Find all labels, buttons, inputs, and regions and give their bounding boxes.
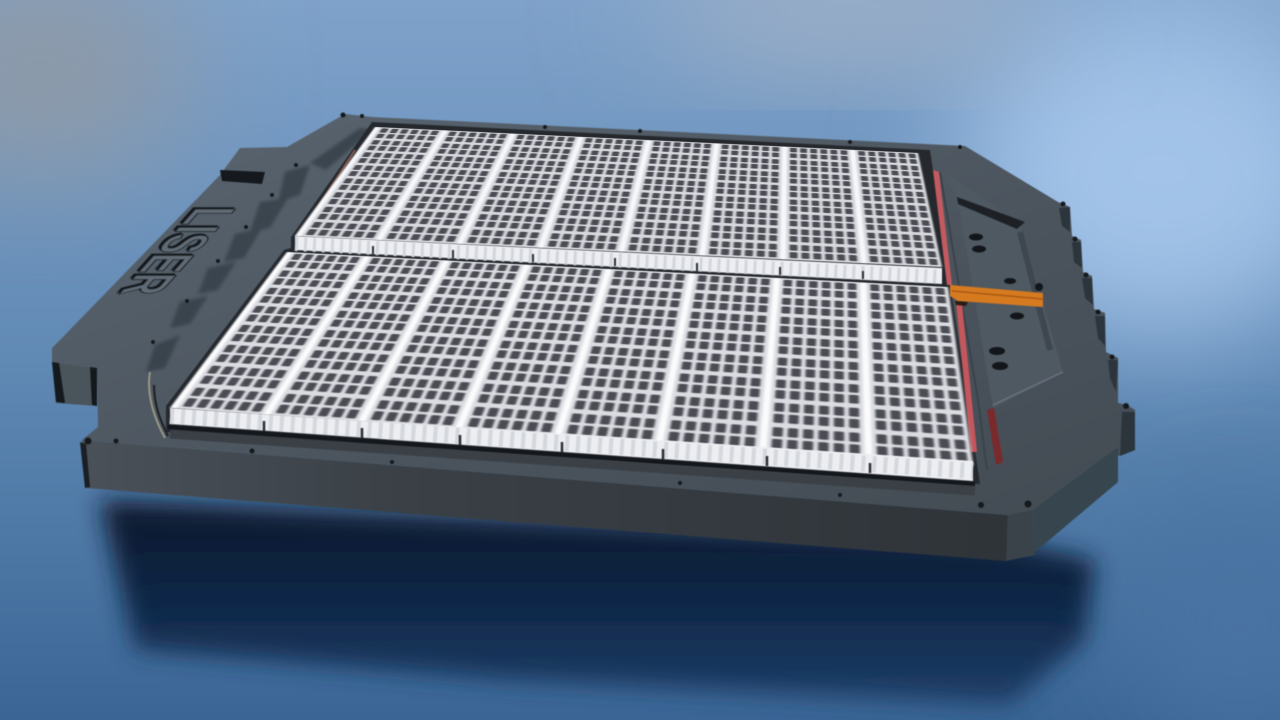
- rear row front strip: [295, 236, 942, 284]
- panel ridge lines: [940, 172, 1063, 470]
- panel holes: [969, 234, 1043, 370]
- recess channel under modules: [168, 427, 975, 491]
- right side ears: [1059, 207, 1135, 456]
- screws: [84, 112, 1129, 508]
- brand lettering: LISER: [105, 207, 249, 295]
- tray front wall: [82, 440, 1008, 561]
- orange busbar connector: [950, 285, 1043, 307]
- red insulation strips: [297, 150, 1003, 465]
- left lug front: [52, 362, 97, 406]
- wall left edge: [80, 442, 90, 488]
- cell modules: rear row: [294, 126, 944, 268]
- panel slot: [957, 197, 1025, 229]
- tray corner block: [1006, 509, 1035, 561]
- tray right wall: [1033, 447, 1118, 552]
- left rail pockets: [146, 128, 372, 372]
- right raised panel: [945, 172, 1063, 408]
- cable strand on left wall: [149, 372, 168, 438]
- front row front strip: [170, 408, 973, 481]
- cell modules: front row: [168, 252, 975, 466]
- dark recess behind modules: [166, 122, 980, 484]
- slot in top-left corner: [220, 170, 265, 184]
- tray top face: [52, 114, 1135, 515]
